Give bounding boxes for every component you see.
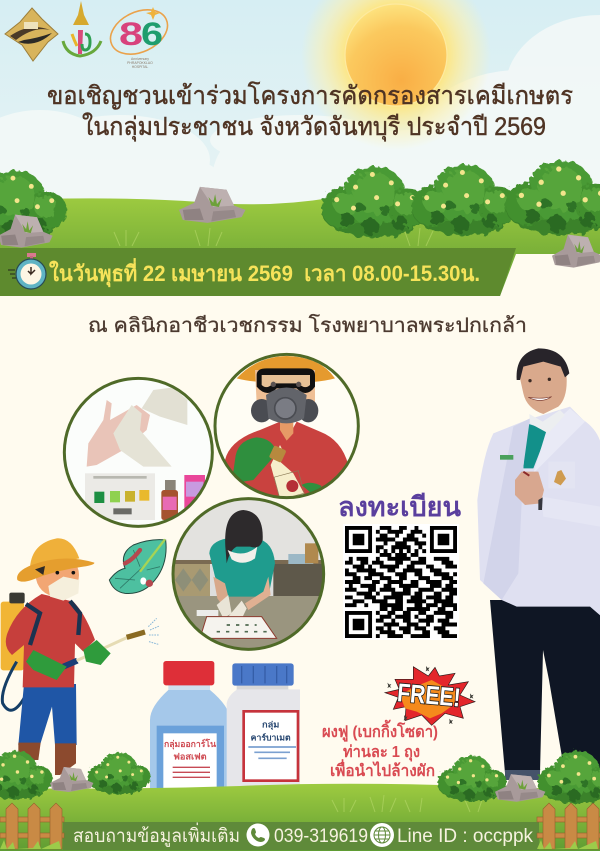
free offer burst: FREE!: [396, 677, 462, 713]
farmer spraying: [1, 538, 166, 775]
top logos: [5, 1, 175, 69]
logo: occupational clinic diamond: [5, 8, 58, 61]
QR code: [343, 524, 459, 640]
fence: left: [0, 803, 64, 849]
bushes: upper right: [322, 159, 600, 238]
rock: doctor's feet: [495, 774, 545, 802]
farmer shirt: [6, 594, 95, 687]
farmer head and hat: [17, 538, 94, 601]
icon: stopwatch: [8, 253, 46, 289]
bottle: carbamate: [227, 663, 300, 791]
title: [47, 81, 573, 142]
logo: 86th anniversary: PHRAPOKKLAO: [127, 61, 153, 65]
free gift text: [322, 719, 438, 780]
logo: 86th anniversary: 8: [119, 16, 143, 52]
contact label: สอบถามข้อมูลเพิ่มเติม: [73, 822, 240, 847]
bottle: carbamate: กลุ่ม: [262, 719, 279, 730]
bottle: organophosphate: [150, 661, 230, 791]
illustration: worker with respirator and poison bottle: [215, 354, 358, 507]
doctor: [477, 348, 600, 780]
logo: 86th anniversary: Anniversary: [131, 57, 149, 61]
farmer gloves: [26, 640, 111, 680]
logo: 86th anniversary: [103, 1, 175, 69]
rock: banner right: [552, 235, 600, 268]
upper meadow: [0, 196, 600, 296]
free gift text: เพื่อนำไปล้างผัก: [330, 759, 435, 780]
bush: upper left: [0, 169, 67, 239]
bottle: organophosphate: กลุ่มออการ์โน: [164, 738, 217, 750]
free offer burst: [385, 666, 475, 725]
bottle: carbamate: คาร์บาเมต: [251, 733, 291, 743]
lower meadow: [0, 784, 600, 851]
date banner: [0, 248, 516, 296]
rock: upper left: [0, 215, 53, 248]
doctor shoe: [505, 770, 540, 780]
line id: Line ID : occppk: [397, 826, 533, 847]
photo: staff reading test cards: [172, 499, 325, 653]
sprayer wand: [63, 618, 159, 667]
date and time text: ในวันพุธที่ 22 เมษายน 2569 เวลา 08.00-15.30น.: [49, 257, 480, 288]
title: ในกลุ่มประชาชน จังหวัดจันทบุรี ประจำปี 2569: [82, 112, 546, 142]
icon: globe: [370, 823, 394, 847]
icon: pest on leaf: [109, 539, 166, 593]
logo: 86th anniversary: HOSPITAL: [132, 65, 148, 69]
logo: 86th anniversary: 6: [141, 16, 163, 52]
bushes: lower: [0, 750, 600, 804]
logo: hospital emblem: [63, 1, 101, 56]
fence: right: [537, 803, 600, 849]
rock: lower left: [50, 767, 93, 792]
spray tank: [1, 593, 25, 670]
photo: cholinesterase finger prick test: [64, 378, 212, 526]
phone number: 039-319619: [274, 826, 368, 847]
rock: upper centre: [179, 187, 246, 223]
bottle: organophosphate: ฟอสเฟต: [173, 751, 207, 761]
free gift text: ท่านละ 1 ถุง: [343, 744, 420, 762]
contact footer: [63, 822, 539, 850]
title: ขอเชิญชวนเข้าร่วมโครงการคัดกรองสารเคมีเกษตร: [47, 81, 573, 110]
free gift text: ผงฟู (เบกกิ้งโซดา): [322, 719, 438, 743]
backpack straps: [26, 601, 80, 645]
venue text: ณ คลินิกอาชีวเวชกรรม โรงพยาบาลพระปกเกล้า: [88, 314, 527, 337]
sky with clouds and sun: [0, 0, 600, 240]
doctor trousers: [490, 600, 600, 773]
registration heading: ลงทะเบียน: [338, 492, 462, 522]
icon: phone: [246, 824, 270, 846]
farmer hose: [2, 662, 43, 710]
farmer trousers and boots: [18, 684, 77, 775]
photo circles: [64, 354, 358, 653]
doctor jacket and head: [477, 348, 600, 617]
